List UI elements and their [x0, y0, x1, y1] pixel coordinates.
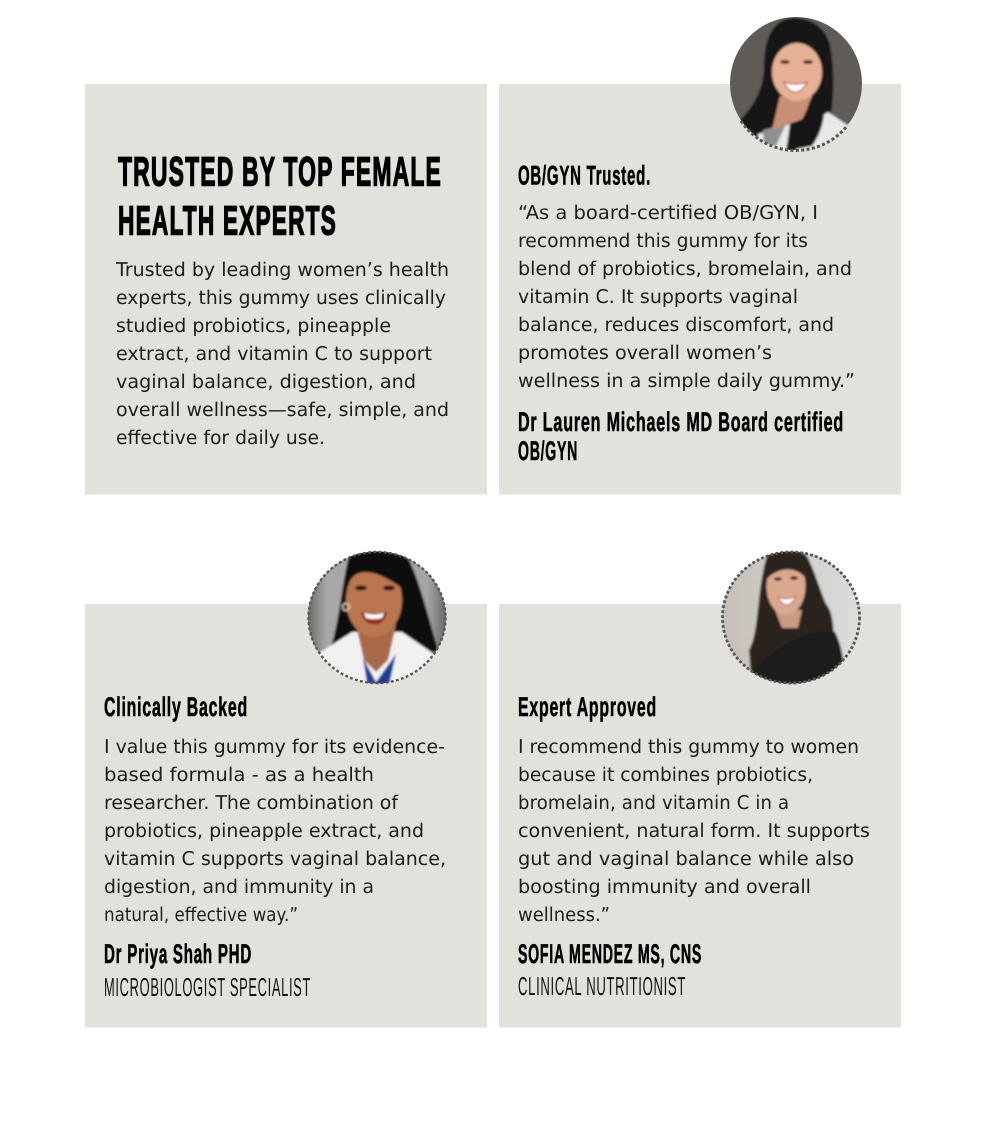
intro text: vaginal balance, digestion, and [116, 371, 416, 393]
quote: researcher. The combination of [104, 792, 399, 814]
quote: digestion, and immunity in a [104, 876, 374, 898]
intro text: experts, this gummy uses clinically [116, 287, 446, 309]
quote [104, 736, 446, 926]
attribution: Dr Priya Shah PHD [104, 939, 252, 969]
panel: clinically backed testimonial [85, 604, 487, 1028]
quote: promotes overall women’s [518, 342, 772, 364]
panel: expert approved testimonial [499, 604, 901, 1028]
quote: “As a board-certified OB/GYN, I [518, 202, 818, 224]
portrait: Dr Lauren Michaels [730, 17, 862, 152]
quote: natural, effective way.” [104, 904, 298, 926]
attribution: OB/GYN [518, 436, 578, 466]
quote: recommend this gummy for its [518, 230, 808, 252]
quote: because it combines probiotics, [518, 764, 813, 786]
title: HEALTH EXPERTS [118, 198, 337, 244]
attribution [104, 939, 311, 1002]
attribution [518, 407, 844, 466]
intro text [115, 259, 449, 449]
quote: vitamin C supports vaginal balance, [104, 848, 446, 870]
panel: clinically backed testimonial: MICROBIOLOGIST SPECIALIST [104, 972, 311, 1002]
intro text: effective for daily use. [116, 427, 325, 449]
attribution [518, 939, 702, 1001]
intro text: studied probiotics, pineapple [116, 315, 391, 337]
portrait: Sofia Mendez [720, 546, 862, 690]
quote: bromelain, and vitamin C in a [518, 792, 789, 814]
heading: Clinically Backed [104, 692, 248, 722]
panel: intro [85, 84, 487, 494]
quote: probiotics, pineapple extract, and [104, 820, 424, 842]
title: TRUSTED BY TOP FEMALE [118, 148, 442, 194]
quote: balance, reduces discomfort, and [518, 314, 834, 336]
quote [518, 736, 870, 926]
quote: boosting immunity and overall [518, 876, 811, 898]
quote: I value this gummy for its evidence- [104, 736, 445, 758]
intro text: extract, and vitamin C to support [116, 343, 432, 365]
portrait: Dr Priya Shah [307, 550, 447, 684]
heading: Expert Approved [518, 692, 657, 722]
intro text: Trusted by leading women’s health [115, 259, 449, 281]
intro text: overall wellness—safe, simple, and [116, 399, 449, 421]
panel: OB/GYN testimonial [499, 84, 901, 494]
title [118, 148, 442, 244]
quote: convenient, natural form. It supports [518, 820, 870, 842]
heading: OB/GYN Trusted. [518, 160, 651, 190]
quote: blend of probiotics, bromelain, and [518, 258, 852, 280]
quote [518, 202, 855, 392]
quote: wellness in a simple daily gummy.” [518, 370, 855, 392]
quote: I recommend this gummy to women [518, 736, 859, 758]
attribution: SOFIA MENDEZ MS, CNS [518, 939, 702, 969]
quote: based formula - as a health [104, 764, 374, 786]
attribution: CLINICAL NUTRITIONIST [518, 971, 686, 1001]
quote: wellness.” [518, 904, 610, 926]
quote: vitamin C. It supports vaginal [518, 286, 798, 308]
quote: gut and vaginal balance while also [518, 848, 854, 870]
